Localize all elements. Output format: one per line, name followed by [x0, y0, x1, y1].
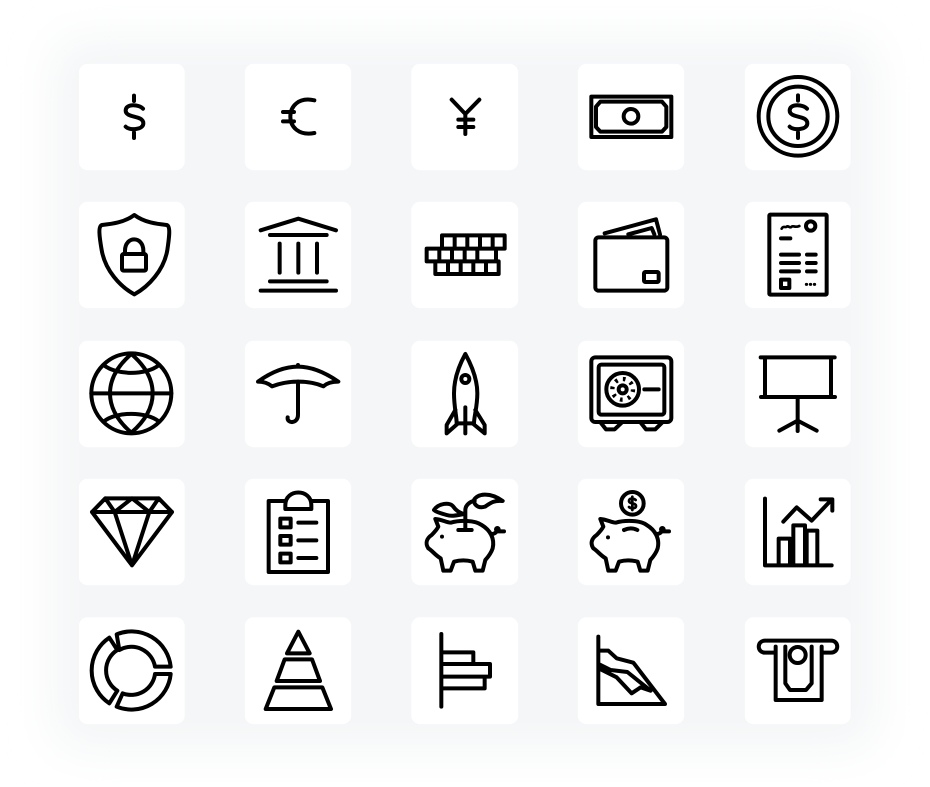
card: diamond [78, 478, 185, 586]
card: piggy bank with coin [578, 478, 684, 586]
icon: decline chart [598, 637, 665, 704]
card: pyramid chart [244, 617, 352, 724]
icon: checklist [269, 492, 328, 572]
icon: pyramid chart [266, 632, 331, 709]
card: growth chart [744, 478, 851, 586]
card: coin [744, 64, 851, 170]
icon: yen sign [452, 100, 479, 134]
card: yen sign [411, 64, 518, 170]
icon: globe [91, 353, 171, 433]
card: security shield [78, 202, 185, 308]
icon: piggy bank with coin [592, 492, 669, 571]
icon: diamond [92, 498, 172, 565]
card: brick wall [411, 202, 518, 308]
icon: dollar sign [126, 96, 143, 138]
icon: umbrella [258, 365, 338, 422]
card: globe [78, 340, 185, 448]
icon: cash machine [759, 641, 837, 700]
icon: bank [261, 219, 336, 291]
card: umbrella [244, 340, 352, 448]
card: document [744, 202, 851, 308]
card: bank [244, 202, 352, 308]
icon: document [769, 215, 827, 295]
icon: rocket [447, 354, 485, 433]
icon: projection screen [761, 357, 835, 431]
card: rocket [411, 340, 518, 448]
card: cash machine [744, 617, 851, 724]
icon: brick wall [427, 235, 505, 274]
icon: security shield [99, 215, 169, 294]
icon: wallet [595, 219, 667, 291]
card: wallet [578, 202, 684, 308]
icon: banknote [591, 97, 671, 137]
icon: euro sign [283, 100, 314, 134]
icon: horizontal bar chart [441, 634, 490, 707]
card: checklist [244, 478, 352, 586]
icon: piggy bank with plant [427, 495, 504, 571]
card: banknote [578, 64, 684, 170]
card: safe [578, 340, 684, 448]
icon: safe [591, 357, 671, 429]
icon: growth chart [765, 499, 832, 565]
card: projection screen [744, 340, 851, 448]
card: donut chart [78, 617, 185, 724]
card: euro sign [244, 64, 352, 170]
card: decline chart [578, 617, 684, 724]
card: dollar sign [78, 64, 185, 170]
icon: coin [759, 77, 837, 156]
icon: donut chart [92, 631, 171, 710]
card: horizontal bar chart [411, 617, 518, 724]
card: piggy bank with plant [411, 478, 518, 586]
